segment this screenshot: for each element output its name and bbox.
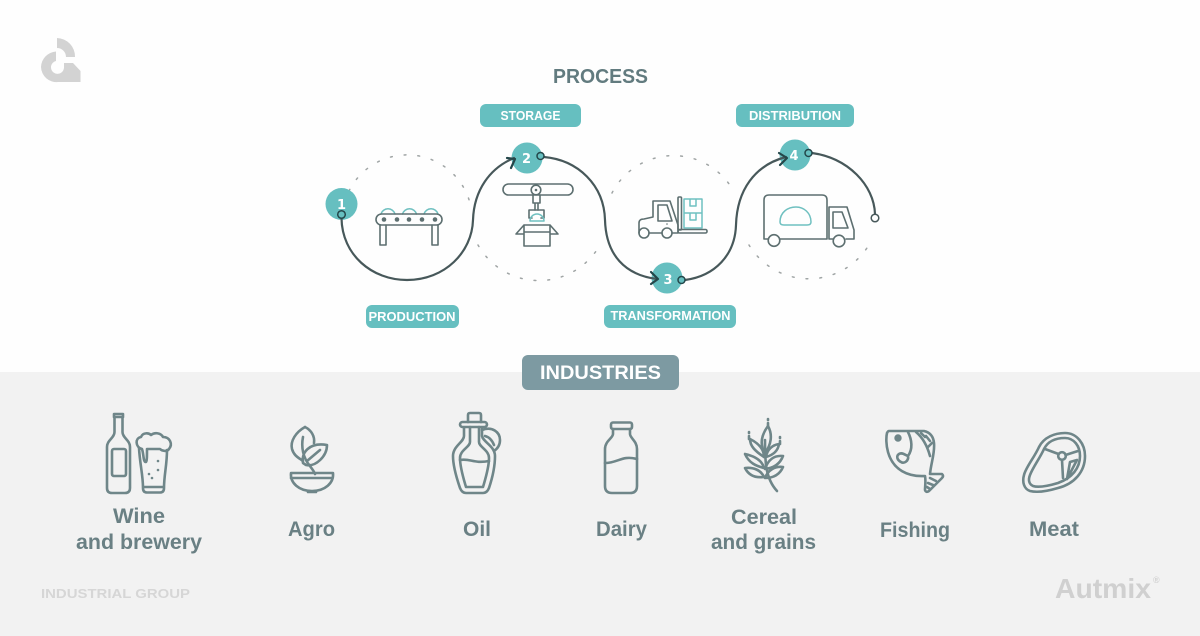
dotted circle: transformation: [612, 156, 733, 193]
icon: leaves in bowl: [291, 427, 333, 492]
industry: agro: [288, 427, 335, 541]
heading: industries: INDUSTRIES: [540, 363, 661, 384]
icon: milk bottle: [605, 422, 637, 493]
label: cereal and grains: [711, 506, 816, 554]
label: wine and brewery: [76, 505, 202, 554]
pill: production: [366, 305, 459, 328]
industry: wine and brewery: [76, 414, 202, 554]
icon: delivery truck: [764, 195, 854, 247]
pill: transformation: [604, 305, 736, 328]
label: agro: Agro: [288, 518, 335, 541]
label: oil: Oil: [463, 518, 491, 541]
industry: oil: [453, 413, 500, 541]
label: wine and brewery: and brewery: [76, 531, 202, 554]
step numbers: [337, 149, 799, 288]
icon: oil jug: [453, 413, 500, 493]
industry: cereal and grains: [711, 419, 816, 554]
pill: storage: [480, 104, 581, 127]
footer: autmix wordmark: ®: [1153, 575, 1160, 585]
pill: distribution: [736, 104, 854, 127]
label: cereal and grains: and grains: [711, 531, 816, 554]
label: wine and brewery: Wine: [113, 505, 165, 528]
icon: fish: [886, 431, 943, 492]
industry: fishing: [880, 431, 950, 542]
pill: transformation: TRANSFORMATION: [610, 308, 730, 323]
icon: robot arm with box: [503, 184, 573, 246]
industry: dairy: [596, 422, 647, 541]
icon: forklift: [639, 197, 707, 238]
process path: [342, 153, 875, 280]
step numbers: 4: [789, 149, 799, 164]
title: process: PROCESS: [553, 66, 648, 88]
step numbers: 1: [337, 198, 346, 213]
pill: distribution: DISTRIBUTION: [749, 108, 841, 123]
label: meat: Meat: [1029, 518, 1079, 541]
industry: meat: [1023, 433, 1085, 541]
pill: production: PRODUCTION: [368, 309, 456, 324]
step numbers: 3: [663, 273, 673, 288]
logo: [41, 38, 80, 82]
icon: steak: [1023, 433, 1085, 492]
dotted circle: distribution: [749, 243, 870, 279]
process diagram: [326, 104, 879, 328]
icon: bottle and beer glass: [107, 414, 171, 493]
label: fishing: Fishing: [880, 519, 950, 542]
dotted circle: production: [349, 155, 470, 203]
step badges: [326, 140, 810, 294]
dotted circle: storage: [478, 243, 601, 281]
heading: industries: [522, 355, 679, 390]
label: dairy: Dairy: [596, 518, 647, 541]
arrowheads: [507, 153, 787, 284]
icon: wheat: [745, 419, 783, 491]
step numbers: 2: [522, 152, 531, 167]
footer: industrial group: INDUSTRIAL GROUP: [41, 587, 190, 601]
pill: storage: STORAGE: [500, 108, 561, 123]
path rings: [338, 150, 879, 284]
label: cereal and grains: Cereal: [731, 506, 797, 529]
footer: autmix wordmark: Autmix: [1055, 573, 1151, 604]
icon: conveyor: [376, 209, 442, 245]
